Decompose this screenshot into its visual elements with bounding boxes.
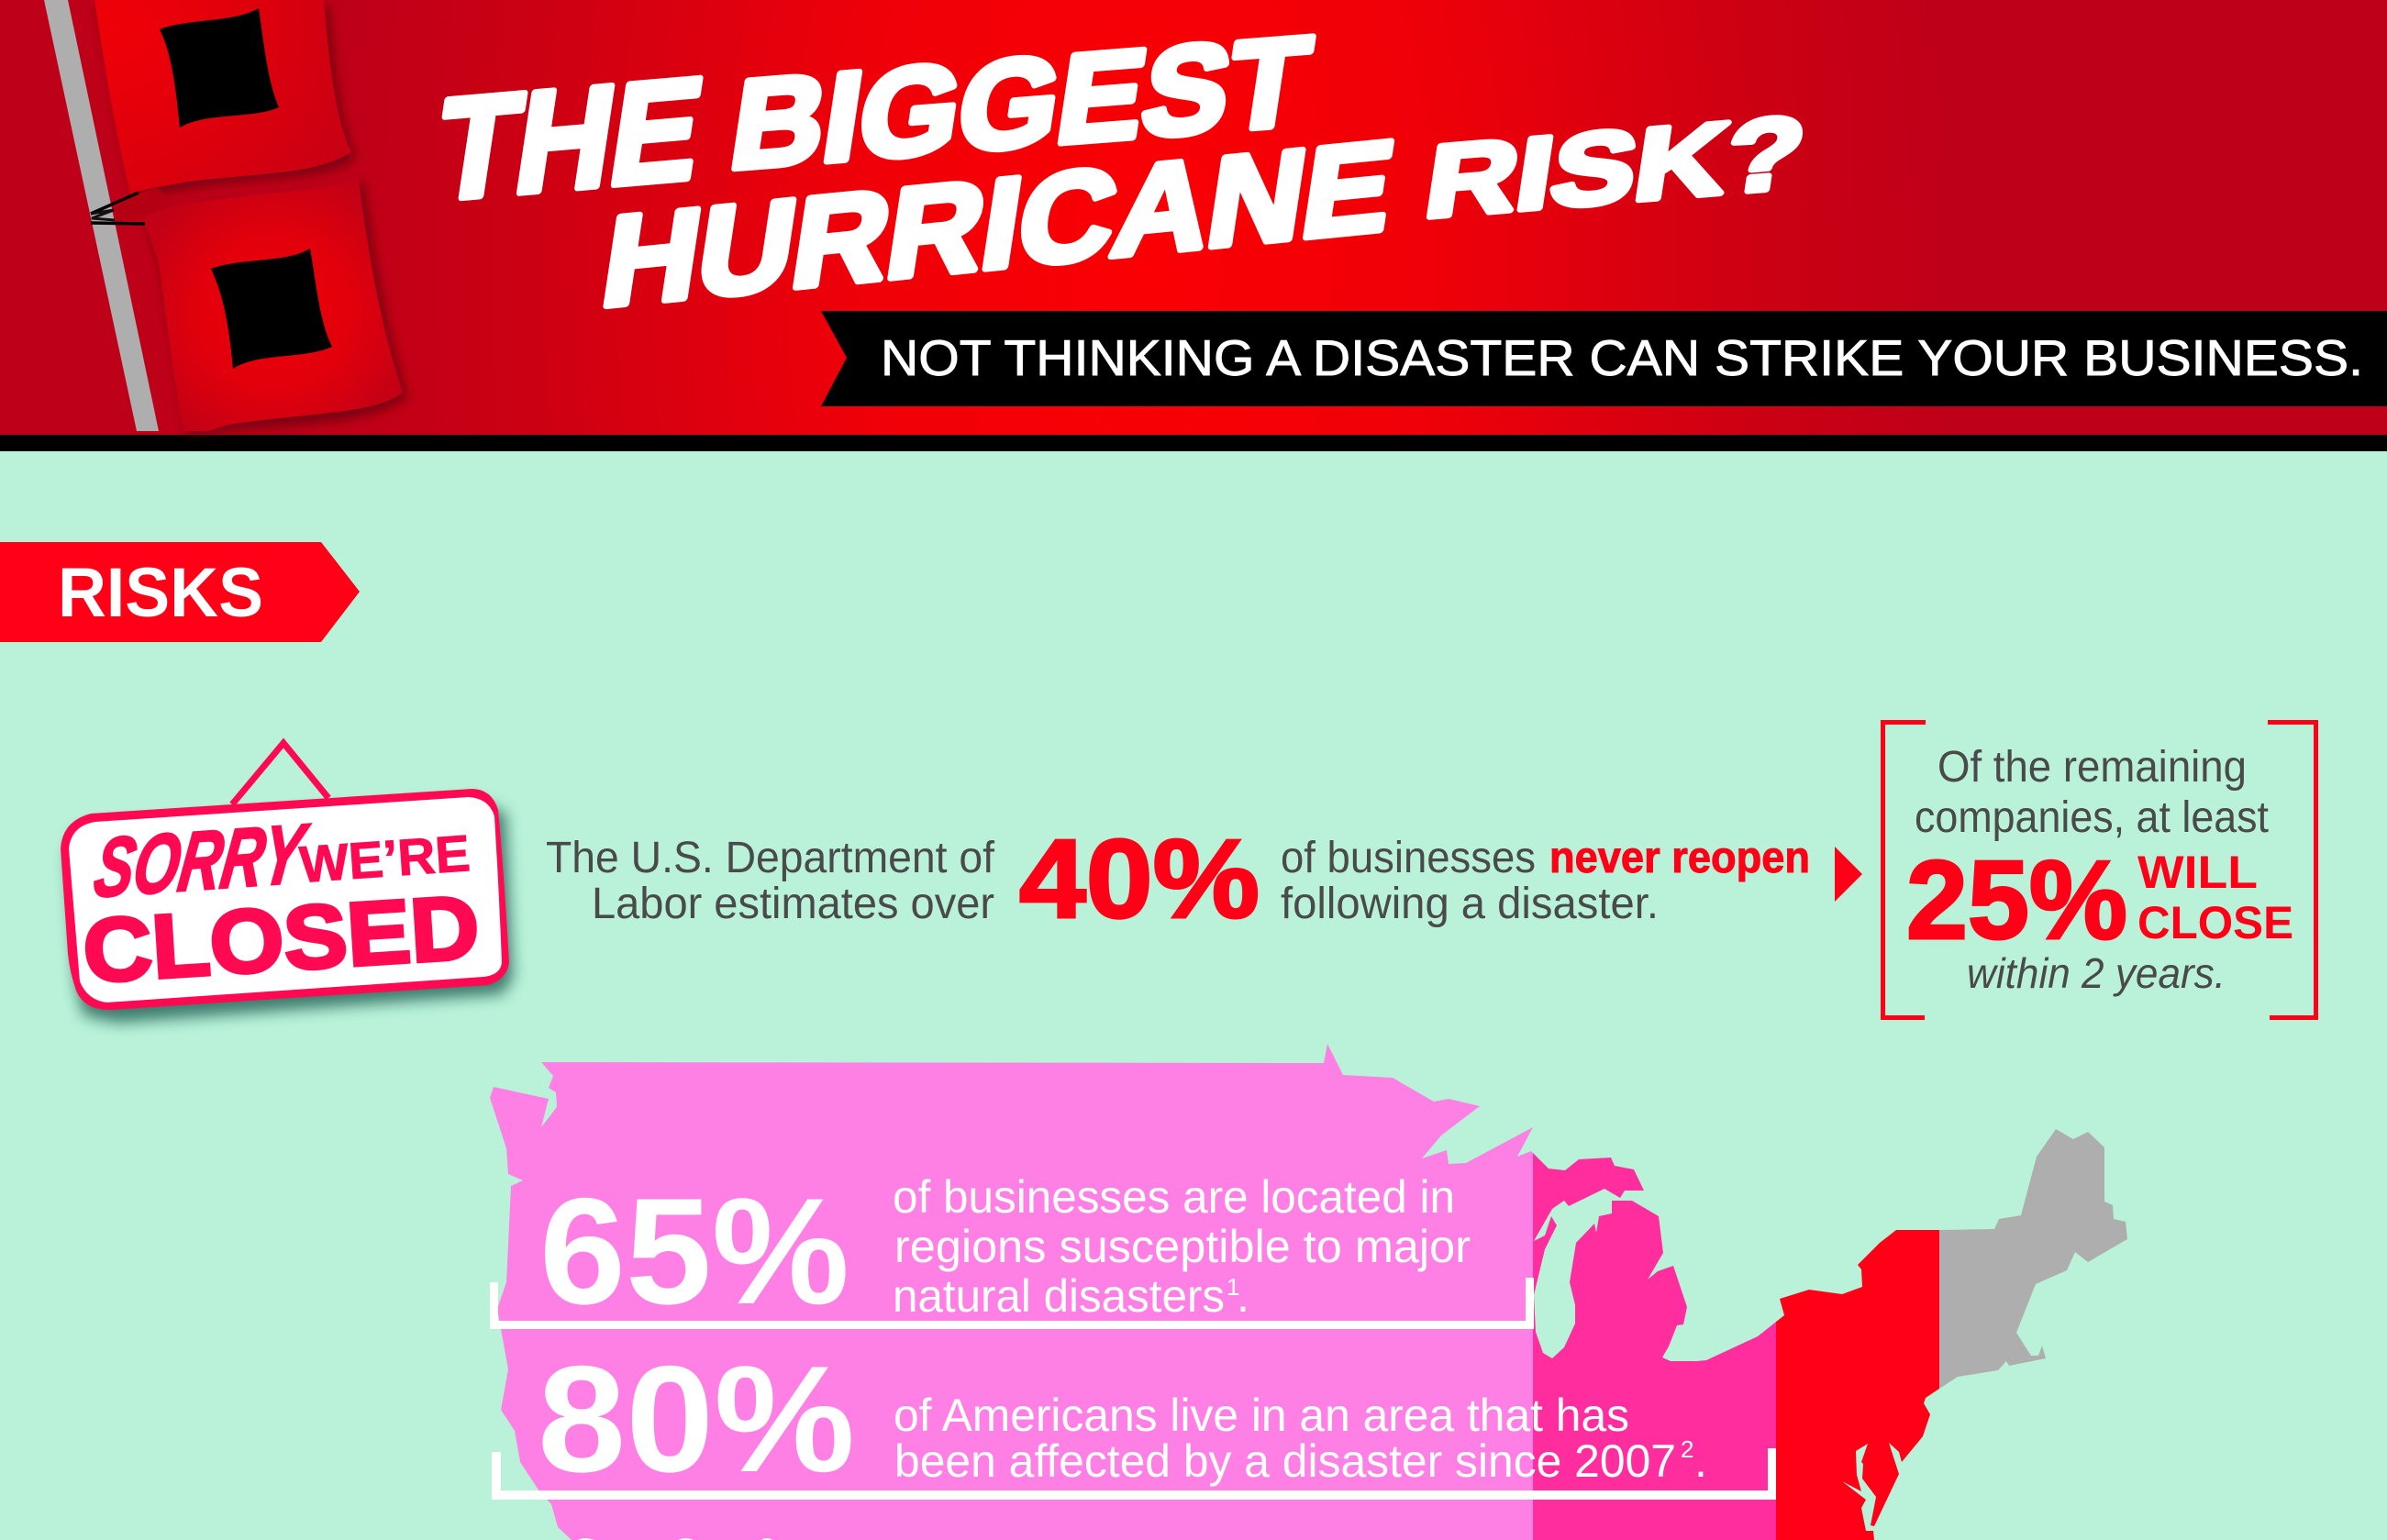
- title: BIGGEST: [723, 10, 1318, 196]
- stat: 65% of businesses: .: [1237, 1270, 1249, 1322]
- map: northern united states risk regions: [459, 1036, 2215, 1540]
- arrow: [1835, 847, 1862, 902]
- stat: 65% of businesses: regions susceptible to major: [894, 1221, 1471, 1272]
- stat: 80% of americans: [492, 1335, 1776, 1503]
- text block: department of labor estimate: following a disaster.: [1281, 880, 1659, 928]
- section tag: risks: RISKS: [58, 554, 263, 632]
- text block: department of labor estimate: Labor estimates over: [592, 880, 994, 928]
- stat: 80% of americans: 80%: [538, 1335, 855, 1503]
- icon: hurricane warning flags: [44, 0, 407, 437]
- callout: remaining companies: [1882, 723, 2315, 1018]
- subtitle ribbon: [821, 311, 2387, 406]
- title: [427, 10, 1812, 334]
- icon: sorry we're closed sign: WE’RE: [297, 824, 472, 893]
- text block: department of labor estimate: of businesses: [1281, 834, 1536, 882]
- stat: 65% of businesses: of businesses are located in: [893, 1171, 1455, 1223]
- stat: 65% of businesses: natural disasters: [893, 1270, 1225, 1322]
- callout: remaining companies: within 2 years.: [1967, 949, 2226, 997]
- stat: 65% of businesses: [490, 1167, 1534, 1335]
- callout: remaining companies: 25%: [1906, 837, 2127, 962]
- stat: 80% of americans: been affected by a disaster since 2007: [894, 1435, 1676, 1487]
- text block: department of labor estimate: never reopen: [1549, 834, 1810, 882]
- next statistic, cut off by the page edge: [571, 1538, 777, 1540]
- header banner: [0, 0, 2387, 451]
- title: RISK?: [1418, 94, 1812, 239]
- stat: 80% of americans: 2: [1681, 1435, 1693, 1463]
- stat: 65% of businesses: 1: [1227, 1273, 1239, 1301]
- subtitle ribbon: NOT THINKING A DISASTER CAN STRIKE YOUR BUSINESS.: [881, 329, 2363, 386]
- title: HURRICANE: [594, 113, 1403, 334]
- icon: sorry we're closed sign: CLOSED: [80, 876, 482, 1002]
- title: THE: [427, 47, 712, 231]
- text block: department of labor estimate: [546, 816, 1810, 941]
- text block: department of labor estimate: 40%: [1019, 816, 1260, 941]
- text block: department of labor estimate: The U.S. Department of: [546, 834, 995, 882]
- stat: 65% of businesses: 65%: [539, 1167, 849, 1335]
- callout: remaining companies: companies, at least: [1915, 793, 2269, 842]
- section tag: risks: [0, 542, 360, 642]
- stat: 80% of americans: of Americans live in an area that has: [894, 1390, 1629, 1441]
- stat: 80% of americans: .: [1694, 1435, 1707, 1487]
- icon: sorry we're closed sign: [61, 743, 513, 1023]
- callout: remaining companies: WILL: [2137, 847, 2258, 898]
- callout: remaining companies: CLOSE: [2137, 897, 2293, 948]
- callout: remaining companies: Of the remaining: [1937, 743, 2247, 792]
- icon: sorry we're closed sign: SORRY: [89, 805, 314, 915]
